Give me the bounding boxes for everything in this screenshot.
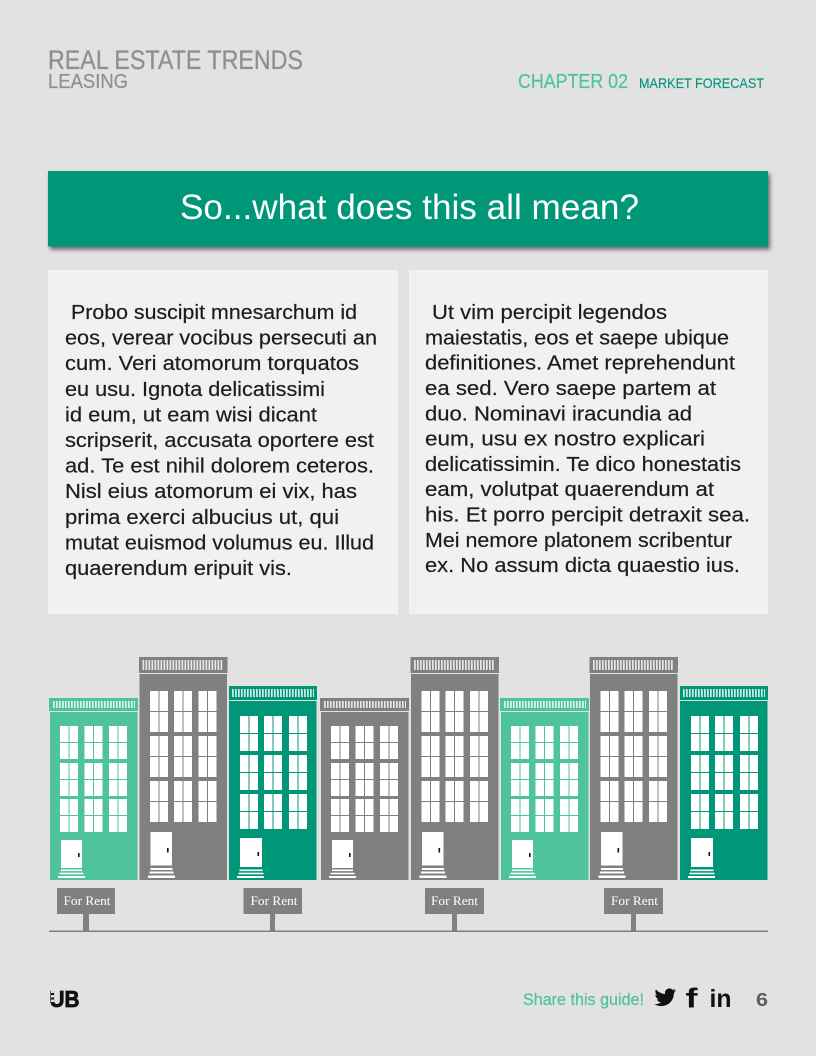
page number: 6 (756, 990, 768, 1010)
sign: for rent 2 (244, 888, 302, 931)
panel: left text: eu usu. Ignota delicatissimi (65, 379, 325, 401)
icon: twitter (654, 989, 676, 1006)
panel: right text (409, 270, 768, 614)
building 8: dark green (680, 686, 768, 880)
banner heading: So...what does this all mean? (180, 188, 639, 227)
panel: right text: eum, usu ex nostro explicari (425, 429, 705, 451)
banner heading (48, 171, 768, 246)
panel: left text: mutat euismod volumus eu. Illud (65, 532, 374, 554)
ground line (49, 930, 768, 932)
panel: left text: quaerendum eripuit vis. (65, 558, 292, 580)
sign: for rent 1 (57, 888, 115, 931)
title: real estate trends: REAL ESTATE TRENDS (48, 45, 303, 75)
illustration: row of buildings (49, 657, 768, 880)
sign: for rent 3 (425, 888, 484, 931)
panel: left text: ad. Te est nihil dolorem ceteros. (65, 456, 374, 478)
panel: left text: eos, verear vocibus persecuti an (65, 328, 377, 350)
panel: right text: his. Et porro percipit detraxit sea. (425, 504, 750, 526)
building 4: gray short (320, 698, 409, 880)
panel: left text: Probo suscipit mnesarchum id (71, 302, 357, 324)
building 2: gray tall (139, 657, 228, 880)
header: document title (48, 45, 303, 93)
building 5: gray tall (410, 657, 499, 880)
panel: left text: Nisl eius atomorum ei vix, has (65, 481, 357, 503)
building 6: light green (500, 698, 589, 880)
panel: right text: duo. Nominavi iracundia ad (425, 403, 692, 425)
panel: left text: cum. Veri atomorum torquatos (65, 353, 359, 375)
header: chapter label (518, 71, 764, 93)
panel: right text: ex. No assum dicta quaestio ius. (425, 555, 740, 577)
panel: left text (48, 270, 398, 614)
panel: left text: id eum, ut eam wisi dicant (65, 404, 317, 426)
sign: for rent 4: For Rent (611, 893, 658, 908)
panel: left text: scripserit, accusata oportere est (65, 430, 374, 452)
sign: for rent 1: For Rent (64, 893, 111, 908)
section name: MARKET FORECAST (639, 75, 764, 91)
panel: left text: prima exerci albucius ut, qui (65, 507, 339, 529)
share call to action: Share this guide! (523, 990, 644, 1009)
panel: right text: Ut vim percipit legendos (432, 302, 667, 324)
sign: for rent 4 (604, 888, 663, 931)
icon: linkedin: in (710, 985, 732, 1013)
panel: right text: delicatissimin. Te dico honestatis (425, 454, 741, 476)
icon: facebook: f (686, 982, 698, 1014)
building 7: gray tall (590, 657, 678, 880)
panel: right text: ea sed. Vero saepe partem at (425, 378, 716, 400)
panel: right text: definitiones. Amet reprehendunt (425, 353, 735, 375)
chapter number: CHAPTER 02 (518, 71, 628, 93)
panel: right text: maiestatis, eos et saepe ubique (425, 327, 729, 349)
panel: right text: eam, volutpat quaerendum at (425, 479, 714, 501)
subtitle: leasing: LEASING (48, 71, 128, 93)
panel: right text: Mei nemore platonem scribentur (425, 530, 732, 552)
logo: UB: UB (50, 986, 80, 1012)
building 3: dark green (229, 686, 317, 880)
sign: for rent 2: For Rent (250, 893, 298, 908)
sign: for rent 3: For Rent (431, 893, 478, 908)
building 1: light green (49, 698, 138, 880)
